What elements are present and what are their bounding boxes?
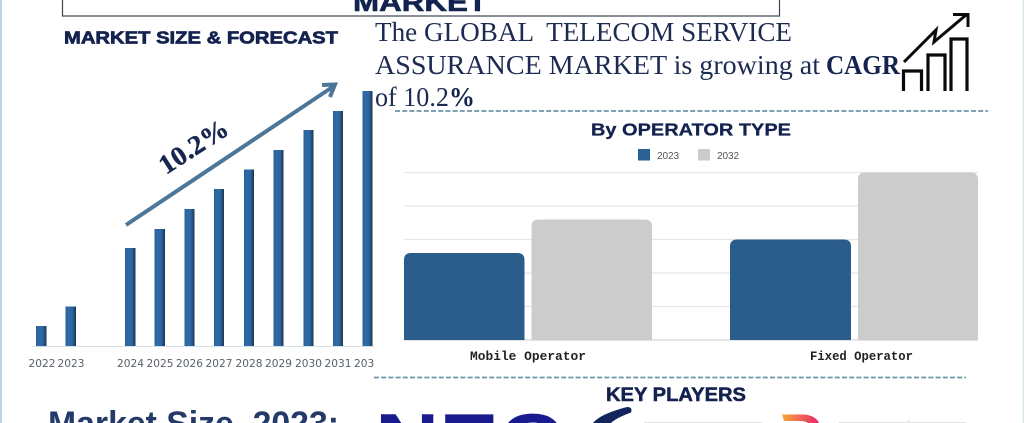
icon: rising bar chart with arrow: [904, 14, 968, 91]
grid lines: [404, 172, 978, 340]
year labels: 2028: [236, 358, 263, 370]
year labels: 2023: [58, 358, 84, 370]
divider: [374, 376, 966, 378]
bar: fixed operator 2023: [730, 240, 851, 340]
year labels: 2030: [295, 358, 322, 370]
CAGR statement: [375, 17, 900, 112]
logo: partially visible wordmarks: [644, 420, 966, 423]
year labels: 2032: [354, 358, 381, 370]
bar chart: market size forecast: [29, 91, 381, 370]
CAGR statement: ASSURANCE MARKET is growing at: [375, 50, 821, 80]
divider: [395, 110, 988, 112]
title box: [62, 0, 780, 17]
year labels: 2026: [176, 358, 203, 370]
CAGR statement: The GLOBAL TELECOM SERVICE: [375, 17, 792, 47]
year labels: 2025: [147, 358, 173, 370]
logo: orange and pink mark: [782, 414, 819, 423]
category label: mobile operator: Mobile Operator: [470, 350, 586, 364]
year labels: 2029: [265, 358, 292, 370]
bars: [36, 91, 372, 346]
year labels: 2024: [117, 358, 144, 370]
heading: key players: KEY PLAYERS: [606, 385, 746, 406]
category label: fixed operator: Fixed Operator: [810, 350, 913, 364]
bar: mobile operator 2023: [404, 253, 524, 340]
year labels: 2027: [206, 358, 232, 370]
year labels: 2031: [325, 358, 351, 370]
logo: blue swoosh: [593, 407, 632, 423]
heading: by operator type: By OPERATOR TYPE: [591, 120, 791, 140]
legend: [638, 149, 739, 162]
bar: mobile operator 2032: [532, 220, 652, 340]
legend: 2023: [657, 151, 679, 162]
panel: by operator type: [378, 114, 1012, 372]
year labels: 2022: [29, 358, 55, 370]
CAGR statement: of 10.2%: [375, 82, 475, 112]
growth arrow: [126, 84, 335, 225]
heading: market size and forecast: MARKET SIZE & FORECAST: [64, 28, 338, 48]
bar: fixed operator 2032: [858, 172, 978, 340]
CAGR statement: CAGR: [826, 50, 900, 80]
growth rate label: 10.2%: [153, 113, 234, 180]
legend: 2032: [717, 151, 739, 162]
year labels: [29, 359, 374, 367]
